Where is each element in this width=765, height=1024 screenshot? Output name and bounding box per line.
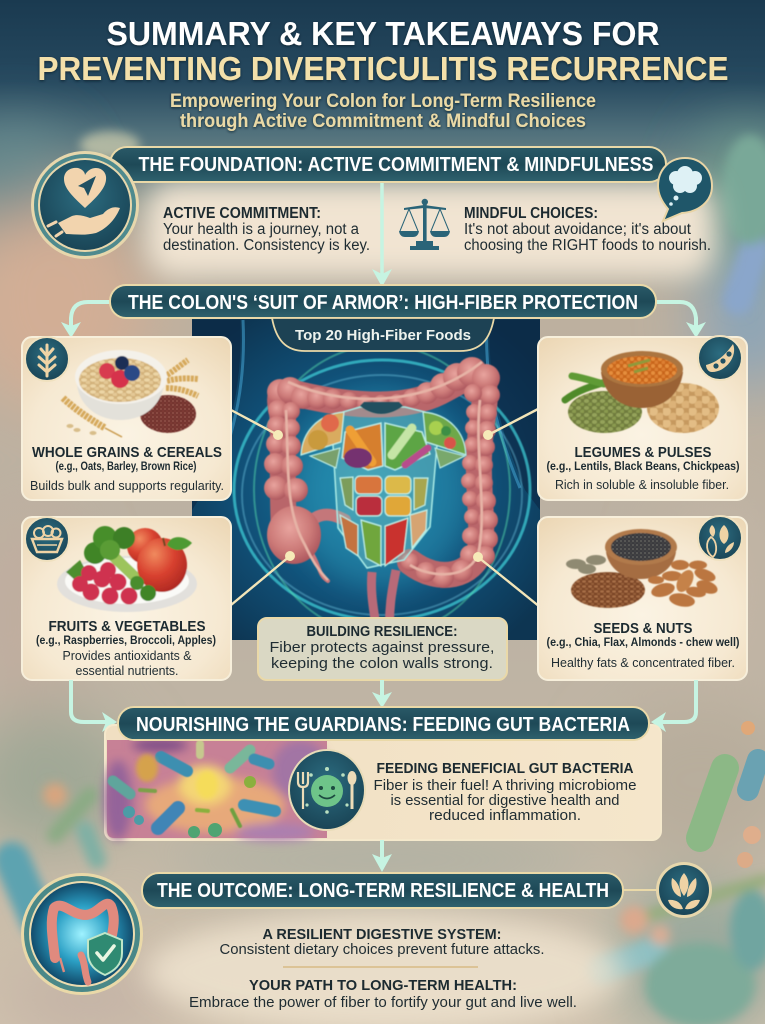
icon: bean pod (698, 336, 742, 380)
text: feeding beneficial gut bacteria: is essential for digestive health and (390, 793, 620, 809)
panel: nourishing the guardians (104, 725, 661, 841)
chest plates (342, 423, 383, 470)
text: path to long-term health: Embrace the power of fiber to fortify your gut and live well. (189, 994, 577, 1011)
callout: building resilience: Fiber protects against pressure, (270, 640, 494, 656)
panel: fruits and vegetables: FRUITS & VEGETABLES (48, 618, 206, 635)
connector lines (231, 408, 540, 607)
label: top 20 high-fiber foods (272, 318, 494, 351)
heading: nourishing banner: NOURISHING THE GUARDIANS: FEEDING GUT BACTERIA (136, 714, 630, 736)
heading: outcome banner: THE OUTCOME: LONG-TERM RESILIENCE & HEALTH (157, 880, 609, 902)
heading: nourishing banner (118, 707, 649, 740)
panel: outcome (21, 862, 712, 1011)
heading: armor banner and side arrows (61, 285, 706, 338)
ab plates (340, 476, 428, 566)
panel: whole grains: WHOLE GRAINS & CEREALS (32, 444, 222, 461)
text: active commitment: ACTIVE COMMITMENT: (163, 205, 321, 222)
text: feeding beneficial gut bacteria (374, 761, 636, 824)
text: path to long-term health: YOUR PATH TO LONG-TERM HEALTH: (249, 977, 517, 994)
icon: fruit basket (25, 517, 69, 561)
arrows: into nourishing section (71, 680, 696, 732)
icon: lotus (656, 862, 712, 918)
callout: building resilience (258, 618, 507, 680)
shoulder plates (301, 412, 344, 455)
panel: fruits and vegetables: (e.g., Raspberries, Broccoli, Apples) (36, 633, 216, 647)
text: mindful choices (464, 205, 711, 254)
text: mindful choices: choosing the RIGHT foods to nourish. (464, 237, 711, 254)
heading: foundation banner: THE FOUNDATION: ACTIVE COMMITMENT & MINDFULNESS (138, 154, 654, 176)
text: mindful choices: MINDFUL CHOICES: (464, 205, 598, 222)
panel: legumes: LEGUMES & PULSES (574, 444, 712, 461)
panel: colon illustration (192, 318, 540, 640)
icon: protected colon with shield (21, 873, 143, 995)
illustration: fruit plate (57, 526, 197, 612)
panel: seeds and nuts: (e.g., Chia, Flax, Almonds - chew well) (546, 635, 740, 649)
illustration: lentils and chickpeas (565, 351, 719, 433)
panel: fruits and vegetables: essential nutrients. (76, 664, 178, 678)
text: path to long-term health (189, 977, 577, 1011)
icon: almond seed (698, 516, 742, 560)
colon (264, 357, 500, 640)
sharper right side bacteria (700, 768, 725, 838)
panel: seeds and nuts: Healthy fats & concentrated fiber. (551, 656, 735, 670)
body silhouette (192, 320, 540, 510)
panel: legumes: (e.g., Lentils, Black Beans, Chickpeas) (546, 459, 740, 473)
text: feeding beneficial gut bacteria: reduced inflammation. (429, 808, 581, 824)
arrow: foundation to armor (372, 180, 392, 287)
text: resilient digestive system (220, 926, 544, 958)
illustration: chia bowl and almonds (566, 529, 719, 609)
illustration: oat bowl (63, 350, 198, 437)
icon: smiling microbe with cutlery (288, 749, 366, 831)
panel: whole grains: Builds bulk and supports regularity. (30, 479, 224, 493)
callout: building resilience: BUILDING RESILIENCE: (306, 624, 458, 640)
panel: seeds and nuts: SEEDS & NUTS (594, 620, 692, 637)
icon: wheat (25, 337, 69, 381)
text: feeding beneficial gut bacteria: Fiber is their fuel! A thriving microbiome (374, 778, 636, 794)
heading: foundation banner (110, 147, 666, 182)
callout: building resilience: keeping the colon walls strong. (271, 656, 493, 672)
title: SUMMARY & KEY TAKEAWAYS FOR (106, 15, 660, 52)
panel: fruits and vegetables: Provides antioxidants & (62, 649, 192, 663)
text: feeding beneficial gut bacteria: FEEDING BENEFICIAL GUT BACTERIA (376, 761, 634, 777)
text: resilient digestive system: Consistent dietary choices prevent future attacks. (220, 941, 544, 958)
panel: seeds and nuts (538, 516, 747, 680)
icon: heart compass in hand (31, 151, 139, 259)
fiber armor vest (301, 402, 466, 568)
icon: thought bubble (658, 158, 712, 221)
heading: armor banner and side arrows: THE COLON'S ‘SUIT OF ARMOR’: HIGH-FIBER PROTECTION (128, 292, 638, 314)
text: active commitment (163, 205, 370, 254)
icon: balance scales (399, 199, 450, 250)
heading: outcome banner (142, 873, 660, 908)
title (38, 15, 728, 87)
subtitle: through Active Commitment & Mindful Choices (180, 110, 586, 132)
panel: whole grains (22, 337, 231, 500)
subtitle (170, 90, 596, 132)
arrow: to outcome (372, 840, 392, 872)
panel: legumes: Rich in soluble & insoluble fiber. (555, 478, 729, 492)
label: top 20 high-fiber foods: Top 20 High-Fiber Foods (295, 327, 471, 344)
panel: whole grains: (e.g., Oats, Barley, Brown Rice) (56, 459, 196, 473)
illustration: gut bacteria (104, 738, 328, 841)
title: PREVENTING DIVERTICULITIS RECURRENCE (38, 50, 728, 87)
panel: foundation (31, 147, 715, 287)
text: mindful choices: It's not about avoidance; it's about (464, 221, 692, 238)
subtitle: Empowering Your Colon for Long-Term Resilience (170, 90, 596, 112)
energy glow rings (234, 345, 530, 635)
panel: fruits and vegetables (22, 517, 231, 680)
panel: legumes (538, 336, 747, 500)
text: active commitment: destination. Consistency is key. (163, 237, 370, 254)
text: active commitment: Your health is a journey, not a (163, 221, 359, 238)
text: resilient digestive system: A RESILIENT DIGESTIVE SYSTEM: (262, 926, 502, 943)
